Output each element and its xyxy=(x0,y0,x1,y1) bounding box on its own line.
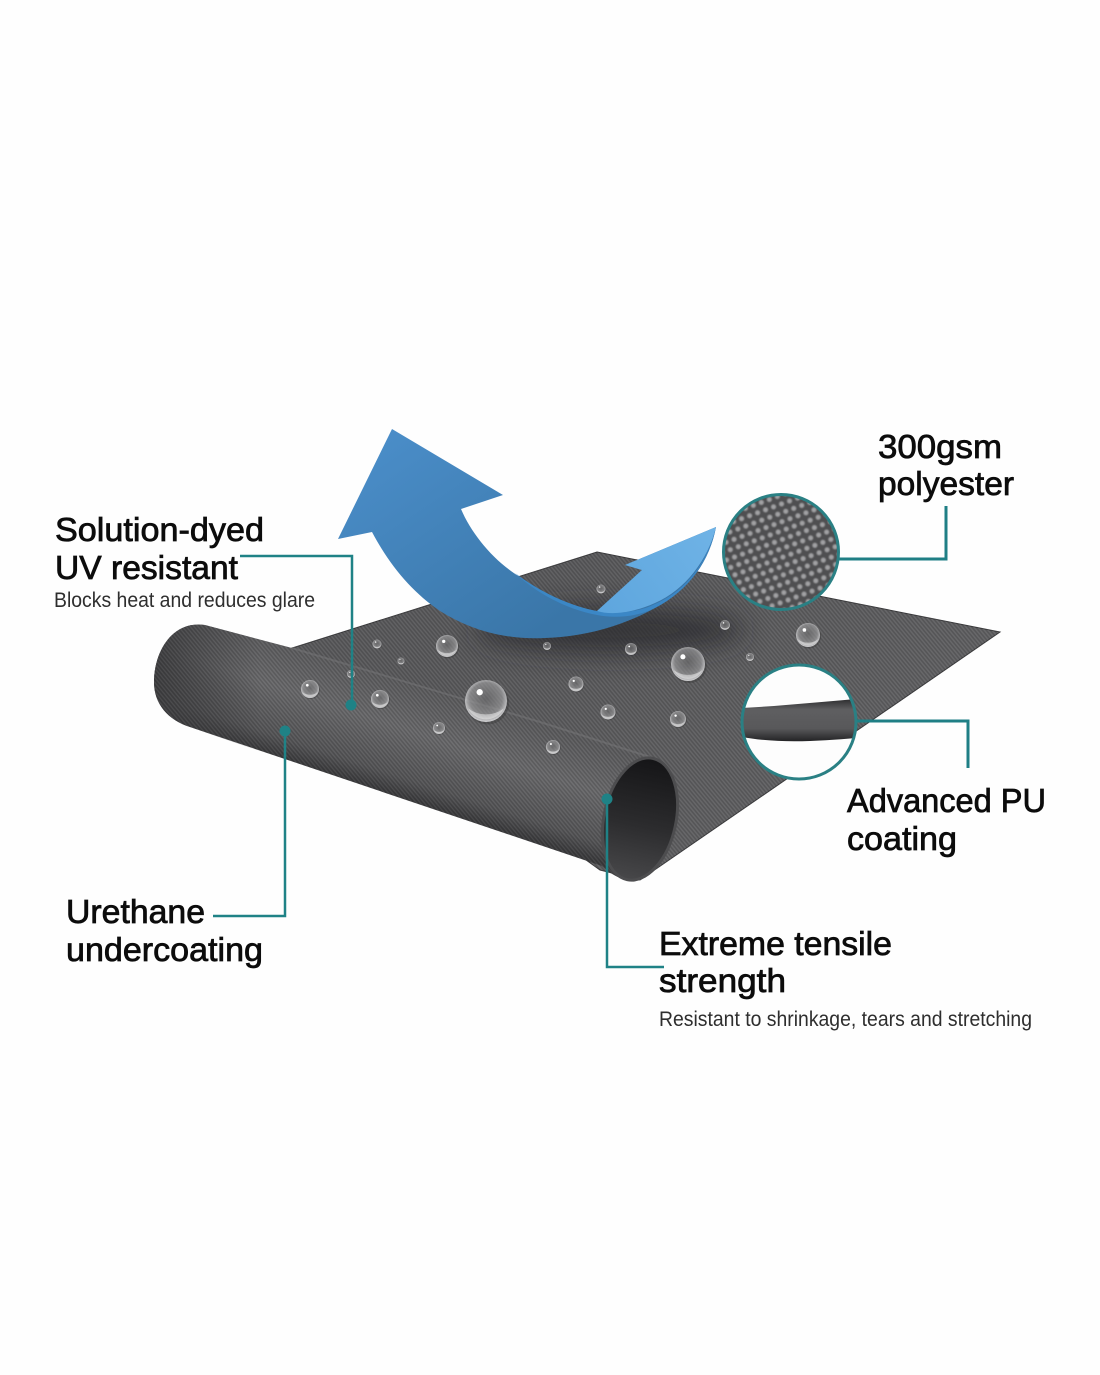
callout: Urethane undercoating xyxy=(66,726,290,968)
icon: blue arrow xyxy=(338,429,716,638)
description: Blocks heat and reduces glare xyxy=(54,589,315,612)
coating detail circle xyxy=(742,665,856,779)
label: Extreme tensile xyxy=(659,925,892,962)
rolled edge xyxy=(154,624,650,881)
callout: 300gsm polyester: polyester xyxy=(878,465,1014,502)
connector xyxy=(838,506,946,559)
fabric detail circle xyxy=(725,496,837,608)
arrow inner edge xyxy=(515,527,716,617)
description: Resistant to shrinkage, tears and stretching xyxy=(659,1008,1032,1031)
fabric sheet xyxy=(154,552,1000,887)
connector xyxy=(240,556,352,705)
callout: Solution-dyed UV resistant xyxy=(54,511,356,710)
callout: Extreme tensile strength: strength xyxy=(659,962,786,999)
callout: Extreme tensile strength xyxy=(602,794,1032,1031)
arrow light face xyxy=(597,527,716,613)
label: Urethane xyxy=(66,893,205,930)
flat sheet xyxy=(292,552,1000,880)
callout: Solution-dyed UV resistant: UV resistant xyxy=(55,549,238,586)
arrow body xyxy=(338,429,716,638)
roll opening xyxy=(592,751,688,887)
label: 300gsm xyxy=(878,428,1002,465)
connector xyxy=(857,721,968,768)
fold highlight xyxy=(292,648,650,757)
connector xyxy=(213,731,285,916)
callout: Urethane undercoating: undercoating xyxy=(66,931,263,968)
arrow shadow xyxy=(475,606,745,654)
label: Solution-dyed xyxy=(55,511,264,548)
connector xyxy=(607,799,664,967)
water droplets xyxy=(301,584,821,755)
callout: 300gsm polyester xyxy=(720,428,1014,614)
callout: Advanced PU coating: coating xyxy=(847,820,957,857)
label: Advanced PU xyxy=(847,782,1046,819)
callout: Advanced PU coating xyxy=(742,665,1046,857)
